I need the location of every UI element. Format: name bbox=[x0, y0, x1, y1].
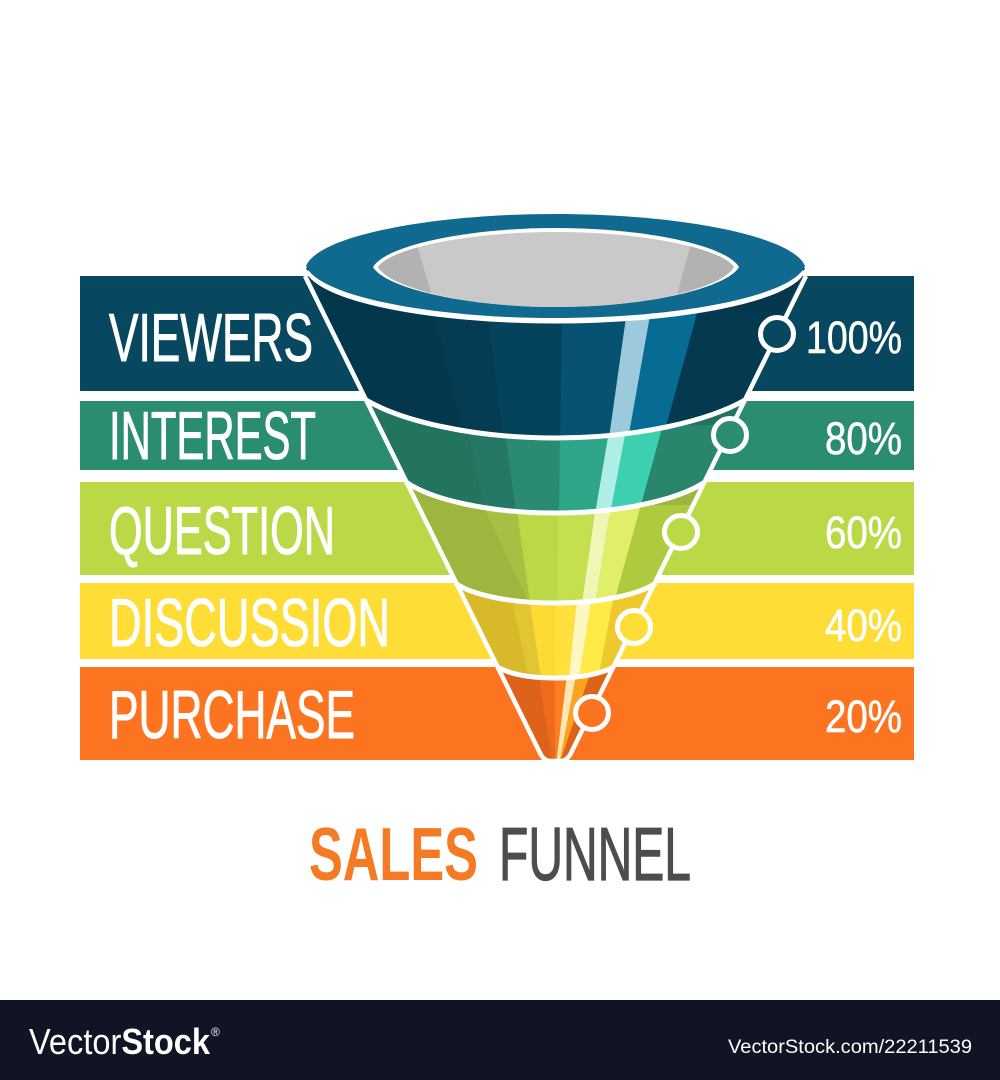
funnel segment: discussion bbox=[462, 590, 648, 676]
band: discussion bbox=[80, 583, 914, 661]
value: 20%: 20% bbox=[825, 691, 902, 742]
label: discussion: DISCUSSION bbox=[109, 585, 390, 661]
label: interest: INTEREST bbox=[109, 398, 316, 474]
value: 80%: 80% bbox=[825, 413, 902, 464]
funnel segment: purchase bbox=[503, 672, 608, 759]
label: viewers: VIEWERS bbox=[109, 300, 313, 376]
funnel outline bbox=[305, 276, 806, 761]
divider arc: discussion bbox=[497, 667, 614, 678]
rim highlight bbox=[306, 271, 805, 323]
title: SALES bbox=[309, 812, 478, 896]
value: 60%: 60% bbox=[825, 507, 902, 558]
band: question bbox=[80, 482, 914, 575]
band: purchase bbox=[80, 667, 914, 760]
divider arc: question bbox=[455, 583, 656, 603]
value: 40%: 40% bbox=[825, 600, 902, 651]
registered mark: ® bbox=[211, 1025, 220, 1039]
footer logo: VectorStock bbox=[29, 1021, 211, 1062]
title: FUNNEL bbox=[499, 812, 691, 896]
divider arc: interest bbox=[406, 482, 705, 513]
footer bar bbox=[0, 1000, 1000, 1080]
value: 100%: 100% bbox=[806, 312, 902, 363]
marker: 80% bbox=[714, 418, 746, 452]
footer url: VectorStock.com/22211539 bbox=[728, 1037, 972, 1058]
funnel opening bbox=[370, 225, 745, 307]
label: question: QUESTION bbox=[109, 493, 335, 569]
band: interest bbox=[80, 398, 914, 474]
marker: 20% bbox=[576, 696, 608, 730]
marker: 60% bbox=[664, 516, 698, 548]
title bbox=[309, 812, 691, 896]
funnel segment: interest bbox=[372, 406, 740, 510]
band: viewers bbox=[80, 276, 914, 391]
label: purchase: PURCHASE bbox=[109, 677, 355, 753]
marker: 100% bbox=[760, 318, 794, 350]
funnel rim bbox=[306, 214, 805, 318]
marker: 40% bbox=[618, 610, 650, 644]
divider arc: viewers bbox=[366, 400, 745, 438]
funnel segment: question bbox=[412, 488, 699, 600]
funnel bbox=[300, 214, 810, 765]
funnel segment: viewers bbox=[300, 265, 810, 445]
